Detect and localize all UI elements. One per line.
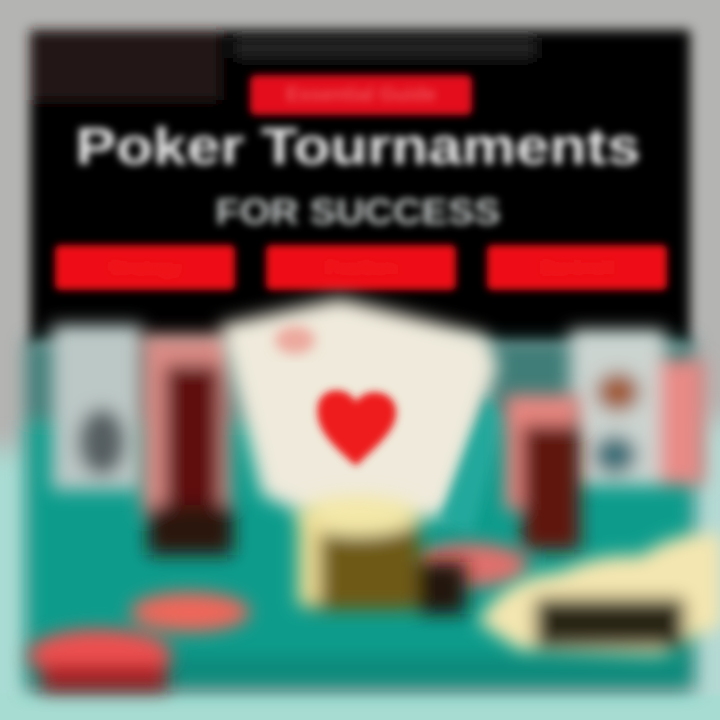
icon: right gold chips (478, 534, 720, 655)
red button: left: Strategy (109, 258, 181, 278)
icon: left chip stack (142, 335, 233, 555)
icon: center gold chips (296, 496, 466, 614)
badge: red label (250, 75, 472, 115)
icon: red chips (28, 592, 250, 691)
icon: left playing card (52, 325, 142, 490)
icon: right playing card (570, 330, 705, 485)
subtitle: FOR SUCCESS (216, 191, 500, 232)
badge: red label: Essential Guide (286, 84, 436, 106)
red button: left (55, 245, 235, 290)
red button: right: Bankroll (541, 258, 613, 278)
icon: right chip stack (412, 395, 580, 587)
panel: black header (30, 30, 690, 345)
red button: center: Position (326, 258, 396, 278)
card back (220, 298, 498, 530)
card pip top (275, 326, 315, 354)
heart (317, 390, 396, 466)
title: Poker Tournaments (76, 118, 640, 176)
icon: teal card edge (440, 395, 505, 535)
red button: right (487, 245, 667, 290)
red button: center (266, 245, 456, 290)
icon: center cards (220, 298, 498, 530)
panel: teal table (26, 340, 694, 690)
